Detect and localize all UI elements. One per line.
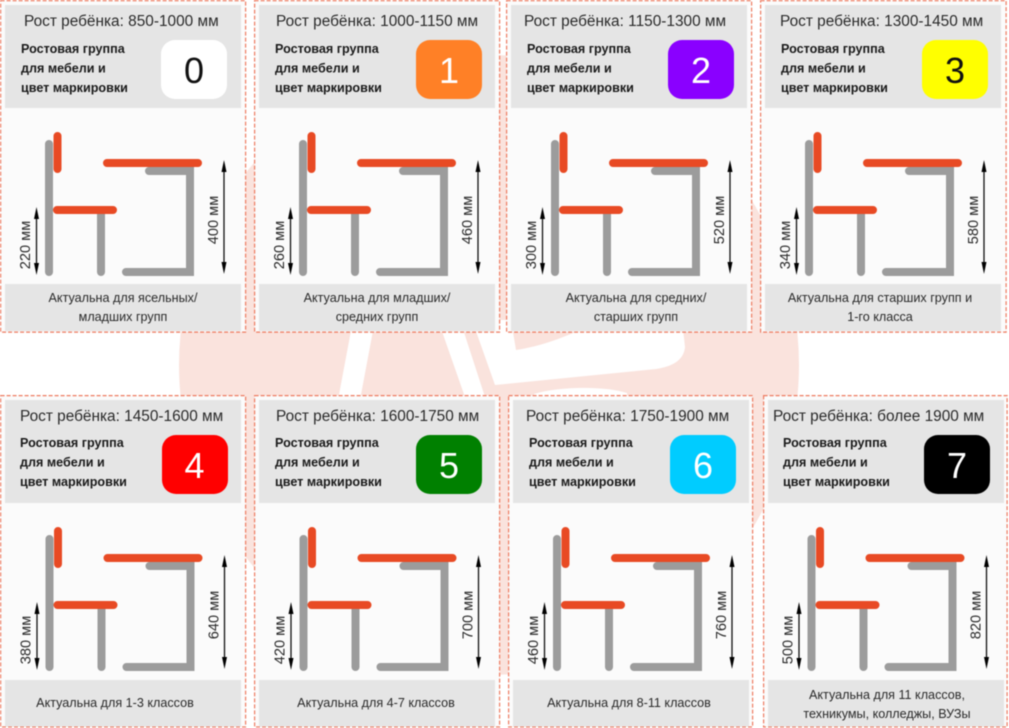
chart: chair and desk (18, 531, 227, 670)
heading: height range: Рост ребёнка: 1150-1300 мм (524, 13, 726, 30)
panel: group 2 (507, 1, 752, 332)
background logo watermark (179, 55, 799, 675)
text block: group label: для мебели и (783, 456, 868, 470)
text block: group label: цвет маркировки (527, 81, 634, 95)
chart: chair and desk: 460 мм (526, 616, 542, 664)
text block: group label: Ростовая группа (527, 42, 632, 56)
badge: group 1 orange (416, 40, 482, 99)
panel: group 4 (1, 396, 246, 727)
chart: chair and desk: 580 мм (966, 196, 982, 244)
badge: group 4 red: 4 (184, 445, 205, 486)
chart: chair and desk: 520 мм (712, 196, 728, 244)
badge: group 7 black (924, 435, 990, 494)
footer text: Актуальна для 8-11 классов (547, 696, 711, 710)
heading: height range: Рост ребёнка: более 1900 мм (773, 408, 984, 425)
badge: group 4 red (162, 435, 228, 494)
text block: group label: цвет маркировки (783, 475, 890, 489)
text block: group label: Ростовая группа (529, 436, 634, 450)
chart: chair and desk: 640 мм (206, 591, 222, 639)
badge: group 3 yellow (922, 40, 988, 99)
text block: group label: для мебели и (527, 62, 612, 76)
chart: chair and desk: 300 мм (524, 221, 540, 269)
footer text: младших групп (79, 310, 167, 324)
chart: chair and desk: 420 мм (272, 616, 288, 664)
chart: chair and desk: 380 мм (18, 616, 34, 664)
text block: group label: для мебели и (21, 62, 106, 76)
badge: group 5 green (416, 435, 482, 494)
footer text: Актуальна для старших групп и (788, 291, 972, 305)
badge: group 2 purple: 2 (691, 50, 711, 91)
heading: height range: Рост ребёнка: 1000-1150 мм (276, 13, 478, 30)
text block: group label: для мебели и (275, 62, 360, 76)
footer text: Актуальна для 11 классов, (809, 688, 965, 702)
chart: chair and desk: 260 мм (272, 221, 288, 269)
text block: group label: цвет маркировки (21, 81, 128, 95)
badge: group 1 orange: 1 (439, 50, 459, 91)
footer text: Актуальна для средних/ (566, 291, 707, 305)
footer text: Актуальна для младших/ (304, 291, 451, 305)
text block: group label: Ростовая группа (783, 436, 888, 450)
chart: chair and desk: 340 мм (778, 221, 794, 269)
panel: group 3 (761, 1, 1006, 332)
badge: group 6 cyan: 6 (693, 445, 713, 486)
badge: group 6 cyan (670, 435, 736, 494)
chart: chair and desk: 820 мм (968, 591, 984, 639)
text block: group label: Ростовая группа (21, 42, 126, 56)
heading: height range: Рост ребёнка: 1600-1750 мм (276, 408, 479, 425)
text block: group label: Ростовая группа (275, 436, 380, 450)
heading: height range: Рост ребёнка: 850-1000 мм (24, 13, 219, 30)
text block: group label: Ростовая группа (781, 42, 886, 56)
heading: height range: Рост ребёнка: 1300-1450 мм (780, 13, 983, 30)
panel: group 7 (764, 396, 1007, 727)
panel: group 6 (509, 396, 753, 727)
footer text: Актуальна для 4-7 классов (297, 696, 455, 710)
chart: chair and desk (526, 531, 734, 670)
text block: group label: для мебели и (20, 456, 105, 470)
badge: group 2 purple (668, 40, 734, 99)
heading: height range: Рост ребёнка: 1750-1900 мм (526, 408, 729, 425)
text block: group label: Ростовая группа (275, 42, 380, 56)
chart: chair and desk: 700 мм (460, 591, 476, 639)
text block: group label: для мебели и (529, 456, 614, 470)
chart: chair and desk (778, 136, 986, 275)
text block: group label: цвет маркировки (275, 81, 382, 95)
text block: group label: для мебели и (781, 62, 866, 76)
footer text: средних групп (336, 310, 418, 324)
badge: group 3 yellow: 3 (945, 50, 965, 91)
panel: group 5 (255, 396, 500, 727)
text block: group label: цвет маркировки (275, 475, 382, 489)
text block: group label: для мебели и (275, 456, 360, 470)
footer text: техникумы, колледжы, ВУЗы (803, 707, 971, 721)
text block: group label: цвет маркировки (781, 81, 888, 95)
badge: group 7 black: 7 (947, 445, 967, 486)
text block: group label: цвет маркировки (20, 475, 127, 489)
footer text: старших групп (594, 310, 678, 324)
chart: chair and desk (272, 531, 481, 670)
chart: chair and desk (18, 136, 226, 275)
text block: group label: цвет маркировки (529, 475, 636, 489)
panel: group 0 (1, 1, 246, 332)
chart: chair and desk (524, 136, 732, 275)
text block: group label: Ростовая группа (20, 436, 125, 450)
chart: chair and desk: 760 мм (714, 591, 730, 639)
chart: chair and desk: 220 мм (18, 221, 34, 269)
badge: group 5 green: 5 (439, 445, 459, 486)
heading: height range: Рост ребёнка: 1450-1600 мм (20, 408, 223, 425)
footer text: 1-го класса (847, 310, 913, 324)
chart: chair and desk (272, 136, 480, 275)
badge: group 0 white (161, 40, 227, 99)
badge: group 0 white: 0 (184, 50, 204, 91)
footer text: Актуальна для 1-3 классов (36, 696, 194, 710)
panel: group 1 (255, 1, 500, 332)
chart: chair and desk: 500 мм (780, 616, 796, 664)
chart: chair and desk (780, 531, 989, 670)
chart: chair and desk: 460 мм (460, 196, 476, 244)
footer text: Актуальна для ясельных/ (49, 291, 198, 305)
chart: chair and desk: 400 мм (206, 196, 222, 244)
